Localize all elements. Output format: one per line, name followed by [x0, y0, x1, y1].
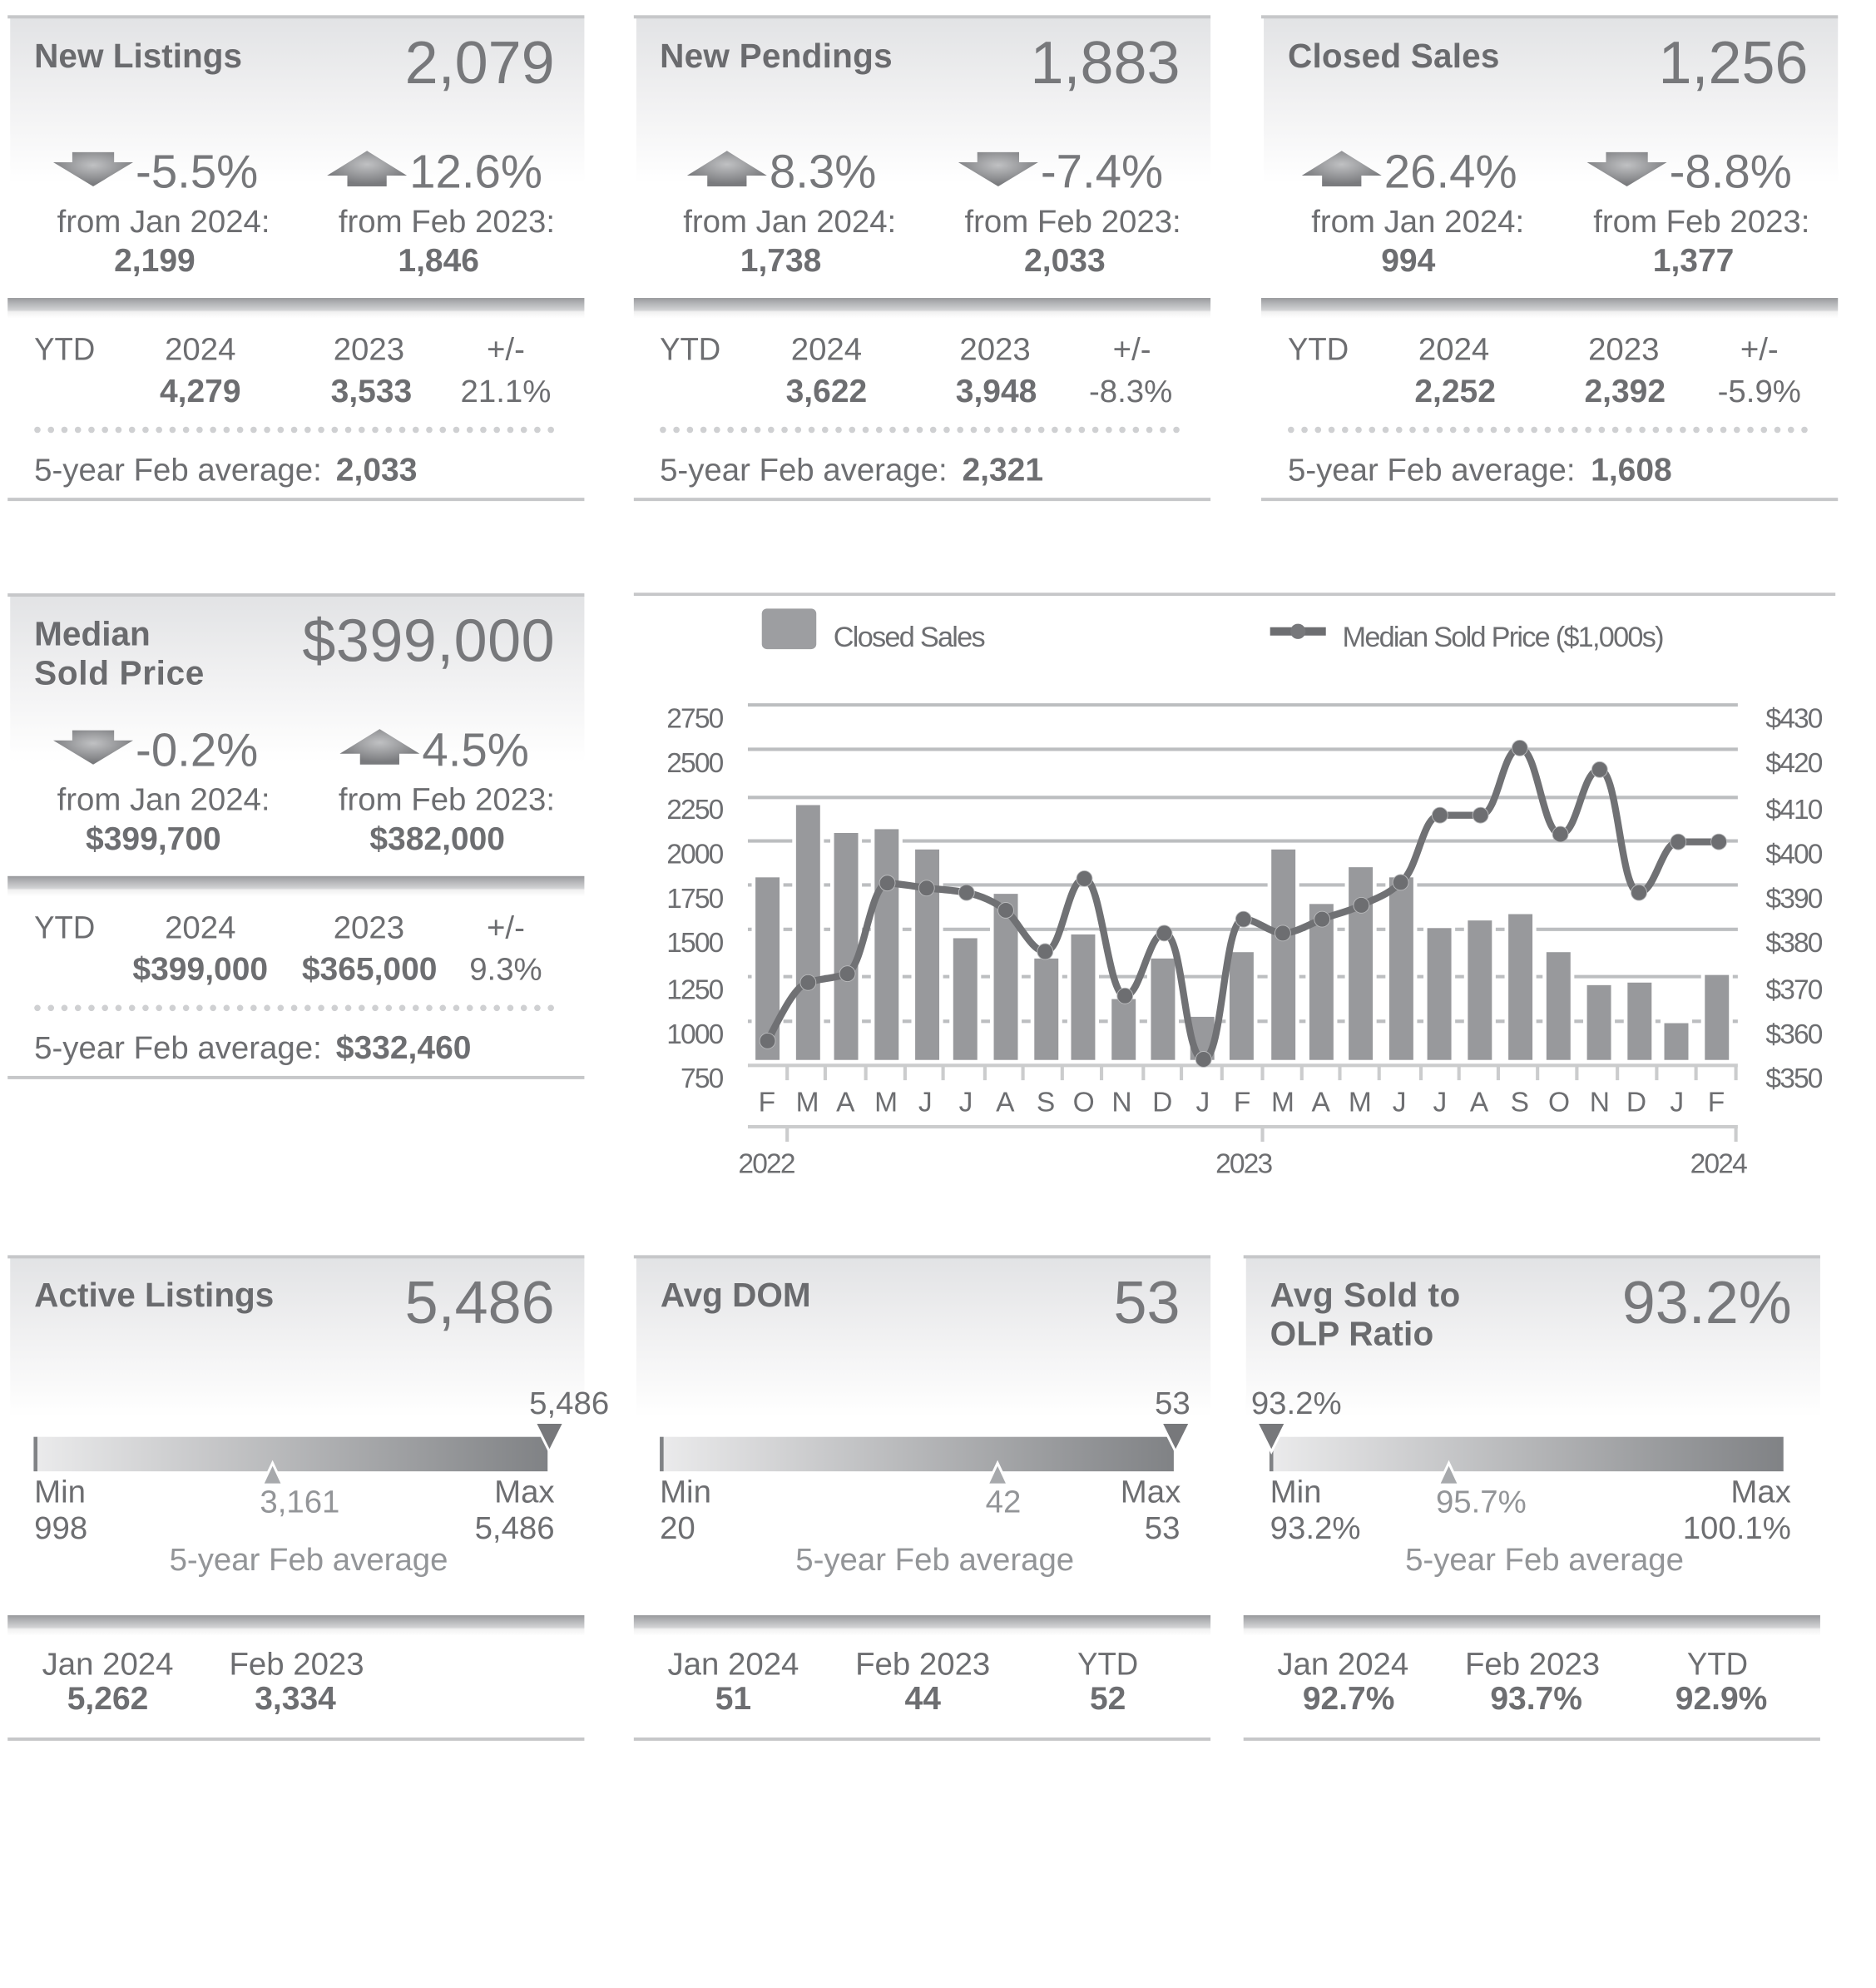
February 2023: Feb 2023: [855, 1647, 990, 1683]
change from February: 12.6%: [409, 145, 542, 197]
five-year average: 5-year Feb average:: [34, 452, 322, 488]
min label: [660, 1474, 711, 1546]
max label: Max: [1730, 1474, 1791, 1510]
month labels: A: [1311, 1087, 1330, 1118]
YTD table: [34, 332, 551, 409]
February 2023: [229, 1647, 364, 1717]
icon: down arrow: [53, 731, 133, 765]
icon: average marker: [1438, 1463, 1459, 1485]
min label: 93.2%: [1270, 1510, 1360, 1546]
icon: down arrow: [958, 152, 1038, 186]
year to date: YTD: [1077, 1647, 1138, 1683]
left axis labels: 2000: [666, 840, 724, 870]
label: from February: from Feb 2023:: [339, 204, 555, 240]
max label: 5,486: [475, 1510, 555, 1546]
left axis labels: 1500: [666, 928, 724, 959]
left axis labels: 2500: [666, 748, 724, 779]
icon: up arrow: [687, 151, 767, 186]
value: closed sales: 1,256: [1658, 30, 1808, 97]
month labels: A: [996, 1087, 1015, 1118]
value: February 2023: $382,000: [369, 821, 505, 857]
month labels: F: [1234, 1087, 1250, 1118]
month labels: O: [1073, 1087, 1095, 1118]
YTD table: [34, 910, 542, 988]
January 2024: [42, 1647, 173, 1717]
left axis labels: 2750: [666, 704, 724, 735]
value: median sold price: $399,000: [302, 608, 555, 675]
min label: [1270, 1474, 1360, 1546]
panel: average sold to OLP ratio: [1244, 1255, 1820, 1741]
max label: 100.1%: [1683, 1510, 1791, 1546]
label: from February: from Feb 2023:: [964, 204, 1181, 240]
month labels: N: [1590, 1087, 1610, 1118]
YTD table: YTD: [34, 332, 95, 368]
five-year average: 5-year Feb average:: [1288, 452, 1576, 488]
YTD table: 2024: [165, 332, 235, 368]
value: active listings: 5,486: [405, 1270, 555, 1336]
right axis labels: $420: [1765, 748, 1823, 779]
line: median sold price: [760, 740, 1726, 1067]
icon: current marker: [535, 1422, 564, 1452]
average value: 95.7%: [1436, 1485, 1527, 1520]
YTD table: +/-: [487, 910, 525, 945]
label: from February: from Feb 2023:: [339, 782, 555, 818]
January 2024: 51: [715, 1681, 751, 1717]
change from February: 4.5%: [422, 723, 529, 776]
five-year average: 1,608: [1591, 452, 1672, 488]
YTD table: YTD: [660, 332, 720, 368]
YTD table: 3,533: [331, 374, 412, 409]
legend: median sold price: Median Sold Price ($1,000s): [1343, 622, 1665, 653]
left axis labels: 2250: [666, 795, 724, 825]
left axis labels: 1000: [666, 1019, 724, 1050]
icon: current marker: [1161, 1422, 1190, 1452]
left axis labels: 1750: [666, 884, 724, 915]
right axis labels: $360: [1765, 1019, 1823, 1050]
min label: Min: [1270, 1474, 1322, 1510]
January 2024: [667, 1647, 799, 1717]
year labels: 2023: [1215, 1148, 1272, 1179]
February 2023: Feb 2023: [1465, 1647, 1600, 1683]
change from January: -0.2%: [136, 723, 258, 776]
value: January 2024: 994: [1381, 243, 1436, 279]
YTD table: 4,279: [160, 374, 241, 409]
average value: 42: [986, 1485, 1021, 1520]
average caption: 5-year Feb average: [795, 1542, 1074, 1578]
legend: closed sales: [762, 608, 986, 653]
change from February: -8.8%: [1670, 145, 1792, 197]
panel: closed sales: [1261, 15, 1838, 501]
icon: down arrow: [53, 152, 133, 186]
month labels: J: [1196, 1087, 1210, 1118]
month labels: [759, 1087, 1725, 1118]
right axis labels: [1765, 704, 1823, 1094]
change from January: 26.4%: [1384, 145, 1517, 197]
YTD table: 2023: [959, 332, 1031, 368]
max label: 53: [1145, 1510, 1181, 1546]
January 2024: 5,262: [67, 1681, 148, 1717]
five-year average: $332,460: [336, 1030, 471, 1066]
value: new listings: 2,079: [405, 30, 555, 97]
label: from January: from Jan 2024:: [57, 782, 270, 818]
heading: active listings: Active Listings: [34, 1276, 274, 1314]
right axis labels: $410: [1765, 795, 1823, 825]
average value: 3,161: [260, 1485, 339, 1520]
heading: median sold price: [34, 615, 204, 692]
heading: median sold price: Sold Price: [34, 654, 204, 692]
year labels: [738, 1148, 1747, 1179]
right axis labels: $370: [1765, 975, 1823, 1006]
average caption: 5-year Feb average: [170, 1542, 448, 1578]
heading: median sold price: Median: [34, 615, 151, 653]
left axis labels: 1250: [666, 975, 724, 1006]
YTD table: 2,252: [1414, 374, 1496, 409]
February 2023: 3,334: [255, 1681, 336, 1717]
right axis labels: $400: [1765, 840, 1823, 870]
max label: [1683, 1474, 1791, 1546]
YTD table: 3,948: [956, 374, 1037, 409]
right axis labels: $380: [1765, 928, 1823, 959]
month labels: J: [1433, 1087, 1447, 1118]
heading: avg DOM: Avg DOM: [661, 1276, 811, 1314]
YTD table: 21.1%: [461, 374, 551, 409]
right axis labels: $350: [1765, 1063, 1823, 1094]
January 2024: [1277, 1647, 1408, 1717]
year to date: YTD: [1687, 1647, 1748, 1683]
January 2024: Jan 2024: [1277, 1647, 1408, 1683]
YTD table: +/-: [1740, 332, 1779, 368]
month labels: F: [1708, 1087, 1725, 1118]
month labels: S: [1511, 1087, 1529, 1118]
bars: closed sales: [755, 805, 1729, 1060]
panel: new listings: [7, 15, 584, 501]
max label: [1121, 1474, 1181, 1546]
range bar: [33, 1437, 547, 1471]
current value label: 5,486: [529, 1386, 609, 1421]
month labels: N: [1111, 1087, 1132, 1118]
month labels: M: [874, 1087, 898, 1118]
icon: up arrow: [1302, 151, 1382, 186]
label: from January: from Jan 2024:: [683, 204, 896, 240]
YTD table: 2024: [1418, 332, 1489, 368]
change from January: 8.3%: [770, 145, 876, 197]
value: avg DOM: 53: [1114, 1270, 1181, 1336]
YTD table: 2,392: [1584, 374, 1666, 409]
average caption: 5-year Feb average: [1405, 1542, 1684, 1578]
YTD table: 2023: [334, 910, 404, 945]
YTD table: [660, 332, 1172, 409]
current value label: 93.2%: [1251, 1386, 1342, 1421]
month labels: J: [959, 1087, 973, 1118]
current value label: 53: [1155, 1386, 1190, 1421]
icon: up arrow: [327, 151, 407, 186]
YTD table: 2024: [165, 910, 235, 945]
value: new pendings: 1,883: [1031, 30, 1181, 97]
year labels: 2024: [1690, 1148, 1747, 1179]
January 2024: Jan 2024: [667, 1647, 799, 1683]
min label: 998: [34, 1510, 87, 1546]
right axis labels: $430: [1765, 704, 1823, 735]
min label: Min: [34, 1474, 86, 1510]
February 2023: [855, 1647, 990, 1717]
YTD table: +/-: [487, 332, 525, 368]
max label: Max: [1121, 1474, 1181, 1510]
month labels: M: [1349, 1087, 1372, 1118]
heading: new pendings: New Pendings: [660, 37, 893, 75]
label: from February: from Feb 2023:: [1593, 204, 1809, 240]
value: January 2024: $399,700: [86, 821, 221, 857]
YTD table: YTD: [34, 910, 95, 945]
year to date: [1676, 1647, 1767, 1717]
month labels: A: [1470, 1087, 1489, 1118]
panel: active listings: [7, 1255, 609, 1741]
month labels: S: [1037, 1087, 1055, 1118]
five-year average: 2,321: [962, 452, 1043, 488]
YTD table: 2023: [334, 332, 404, 368]
min label: Min: [660, 1474, 711, 1510]
heading: closed sales: Closed Sales: [1288, 37, 1499, 75]
value: February 2023: 2,033: [1024, 243, 1106, 279]
year labels: 2022: [738, 1148, 794, 1179]
month labels: M: [1271, 1087, 1294, 1118]
legend: closed sales: Closed Sales: [834, 622, 986, 653]
February 2023: [1465, 1647, 1600, 1717]
icon: up arrow: [339, 729, 419, 765]
value: February 2023: 1,377: [1653, 243, 1734, 279]
YTD table: 2024: [791, 332, 862, 368]
icon: current marker: [1257, 1422, 1286, 1452]
heading: new listings: New Listings: [34, 37, 242, 75]
value: January 2024: 2,199: [114, 243, 196, 279]
value: avg sold to OLP ratio: 93.2%: [1622, 1270, 1792, 1336]
five-year average: [34, 1030, 471, 1066]
panel: combo chart: [634, 592, 1835, 1179]
year to date: 52: [1090, 1681, 1126, 1717]
icon: average marker: [262, 1463, 283, 1485]
February 2023: 93.7%: [1490, 1681, 1582, 1717]
year to date: 92.9%: [1676, 1681, 1767, 1717]
max label: Max: [494, 1474, 555, 1510]
heading: avg sold to OLP ratio: [1270, 1276, 1460, 1353]
label: from January: from Jan 2024:: [57, 204, 270, 240]
five-year average: 5-year Feb average:: [34, 1030, 322, 1066]
panel: median sold price: [7, 593, 584, 1079]
YTD table: -8.3%: [1089, 374, 1172, 409]
YTD table: 9.3%: [469, 952, 542, 988]
month labels: J: [918, 1087, 933, 1118]
heading: avg sold to OLP ratio: OLP Ratio: [1270, 1315, 1433, 1353]
change from January: -5.5%: [136, 145, 258, 197]
year to date: [1077, 1647, 1138, 1717]
range bar: [1270, 1437, 1784, 1471]
label: from January: from Jan 2024:: [1311, 204, 1524, 240]
five-year average: 2,033: [336, 452, 417, 488]
month labels: A: [836, 1087, 855, 1118]
January 2024: 92.7%: [1303, 1681, 1394, 1717]
max label: [475, 1474, 555, 1546]
panel: new pendings: [634, 15, 1210, 501]
month labels: F: [759, 1087, 775, 1118]
right axis labels: $390: [1765, 884, 1823, 915]
YTD table: 2023: [1588, 332, 1659, 368]
month labels: D: [1152, 1087, 1172, 1118]
month labels: O: [1548, 1087, 1570, 1118]
five-year average: 5-year Feb average:: [660, 452, 948, 488]
February 2023: 44: [905, 1681, 941, 1717]
YTD table: YTD: [1288, 332, 1349, 368]
YTD table: 3,622: [786, 374, 867, 409]
January 2024: Jan 2024: [42, 1647, 173, 1683]
February 2023: Feb 2023: [229, 1647, 364, 1683]
value: February 2023: 1,846: [398, 243, 479, 279]
YTD table: $365,000: [302, 952, 438, 988]
YTD table: +/-: [1113, 332, 1151, 368]
month labels: D: [1626, 1087, 1646, 1118]
YTD table: $399,000: [132, 952, 268, 988]
min label: 20: [660, 1510, 695, 1546]
month labels: M: [796, 1087, 819, 1118]
left axis labels: 750: [681, 1063, 724, 1094]
YTD table: -5.9%: [1718, 374, 1801, 409]
value: January 2024: 1,738: [740, 243, 821, 279]
month labels: J: [1670, 1087, 1684, 1118]
left axis labels: [666, 704, 724, 1094]
icon: average marker: [987, 1463, 1007, 1485]
month labels: J: [1393, 1087, 1406, 1118]
YTD table: [1288, 332, 1801, 409]
panel: average days on market: [634, 1255, 1210, 1741]
heading: avg sold to OLP ratio: Avg Sold to: [1270, 1276, 1460, 1314]
change from February: -7.4%: [1041, 145, 1163, 197]
icon: down arrow: [1587, 152, 1667, 186]
range bar: [660, 1437, 1174, 1471]
min label: [34, 1474, 87, 1546]
